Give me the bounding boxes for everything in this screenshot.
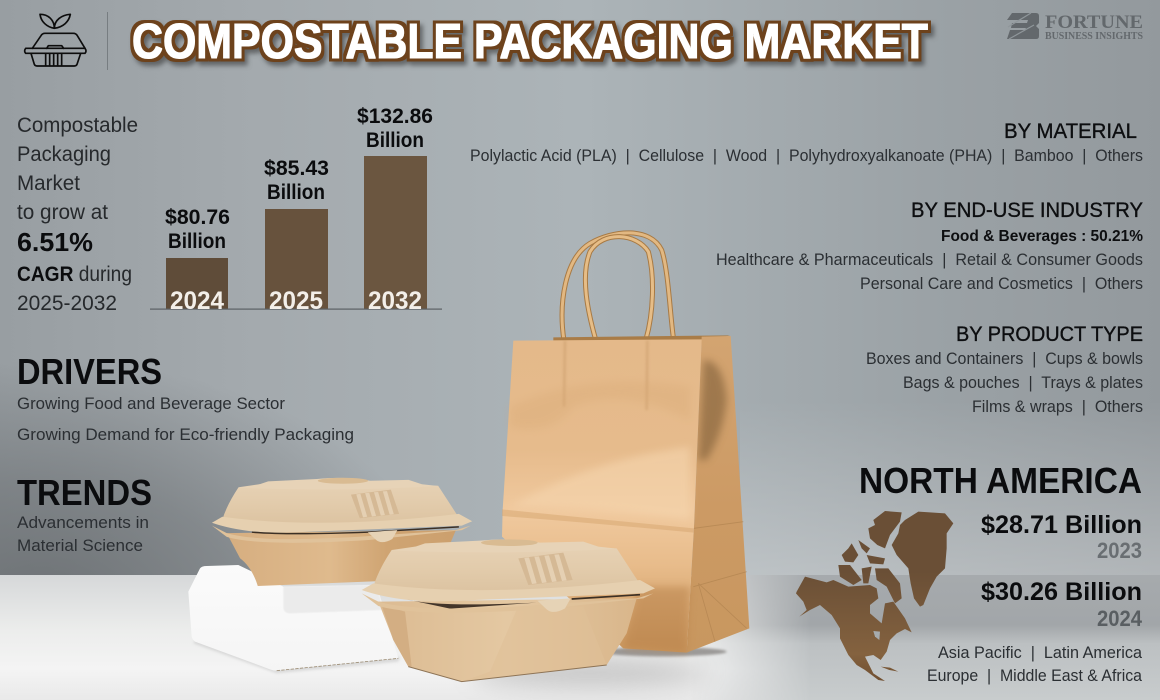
- bar chart: market size: 2032: [368, 287, 422, 315]
- logo: Fortune Business Insights: [1007, 12, 1143, 42]
- illustration: paper bag: [502, 233, 749, 656]
- panel: by product type: [866, 323, 1143, 416]
- title: COMPOSTABLE PACKAGING MARKET: [132, 15, 928, 69]
- bar chart: market size: Billion: [168, 230, 226, 253]
- bar chart: market size: 2024: [170, 287, 224, 315]
- bar chart: market size: $85.43: [264, 157, 329, 180]
- logo: Fortune Business Insights: FORTUNE: [1045, 12, 1143, 33]
- illustration: right compostable box: [362, 539, 655, 682]
- bar chart: market size: 2025: [269, 287, 323, 315]
- bar chart: market size: $80.76: [165, 206, 230, 229]
- panel: regional values: Asia Pacific | Latin America: [938, 643, 1143, 662]
- icon: food box with leaves: [25, 14, 86, 66]
- panel: by product type: Bags & pouches | Trays & plates: [903, 373, 1143, 392]
- panel: by material: [470, 120, 1143, 165]
- text block: CAGR summary: [17, 114, 138, 315]
- map: North America: [796, 511, 953, 681]
- panel: drivers: Growing Demand for Eco-friendly Packaging: [17, 425, 354, 444]
- panel: trends: Advancements in: [17, 513, 149, 532]
- panel: by end-use industry: Personal Care and Cosmetics | Others: [860, 274, 1143, 293]
- panel: by end-use industry: [716, 199, 1143, 293]
- panel: by end-use industry: Healthcare & Pharmaceuticals | Retail & Consumer Goods: [716, 250, 1143, 269]
- panel: drivers: Growing Food and Beverage Sector: [17, 394, 285, 413]
- panel: drivers: DRIVERS: [17, 351, 162, 392]
- panel: regional values: 2023: [1097, 538, 1142, 563]
- panel: by product type: Films & wraps | Others: [972, 397, 1143, 416]
- bar chart: market size: Billion: [267, 181, 325, 204]
- bar chart: market size: Billion: [366, 129, 424, 152]
- text block: CAGR summary: Compostable: [17, 114, 138, 137]
- panel: by end-use industry: Food & Beverages : 50.21%: [941, 228, 1143, 245]
- panel: trends: TRENDS: [17, 472, 152, 513]
- panel: trends: [17, 472, 152, 555]
- panel: by end-use industry: BY END-USE INDUSTRY: [911, 199, 1143, 222]
- bar chart: market size: [150, 105, 442, 315]
- text block: CAGR summary: CAGR during: [17, 263, 132, 286]
- text block: CAGR summary: Market: [17, 172, 80, 195]
- panel: by product type: BY PRODUCT TYPE: [956, 323, 1143, 346]
- text block: CAGR summary: 2025-2032: [17, 292, 117, 315]
- panel: regional values: $28.71 Billion: [981, 511, 1142, 539]
- illustration: white tray: [188, 565, 400, 673]
- text block: CAGR summary: Packaging: [17, 143, 111, 166]
- panel: by product type: Boxes and Containers | Cups & bowls: [866, 349, 1143, 368]
- panel: by material: BY MATERIAL: [1004, 120, 1137, 143]
- bar chart: market size: $132.86: [357, 105, 433, 128]
- panel: regional values: 2024: [1097, 606, 1143, 631]
- text block: CAGR summary: to grow at: [17, 201, 108, 224]
- panel: trends: Material Science: [17, 536, 143, 555]
- panel: regional values: Europe | Middle East & Africa: [927, 666, 1143, 685]
- panel: drivers: [17, 351, 354, 444]
- logo: Fortune Business Insights: BUSINESS INSIGHTS: [1045, 31, 1143, 42]
- heading: North America: NORTH AMERICA: [859, 460, 1142, 501]
- panel: regional values: $30.26 Billion: [981, 578, 1142, 606]
- panel: regional values: [927, 511, 1143, 685]
- illustration: left compostable box: [212, 478, 472, 586]
- text block: CAGR summary: 6.51%: [17, 227, 93, 257]
